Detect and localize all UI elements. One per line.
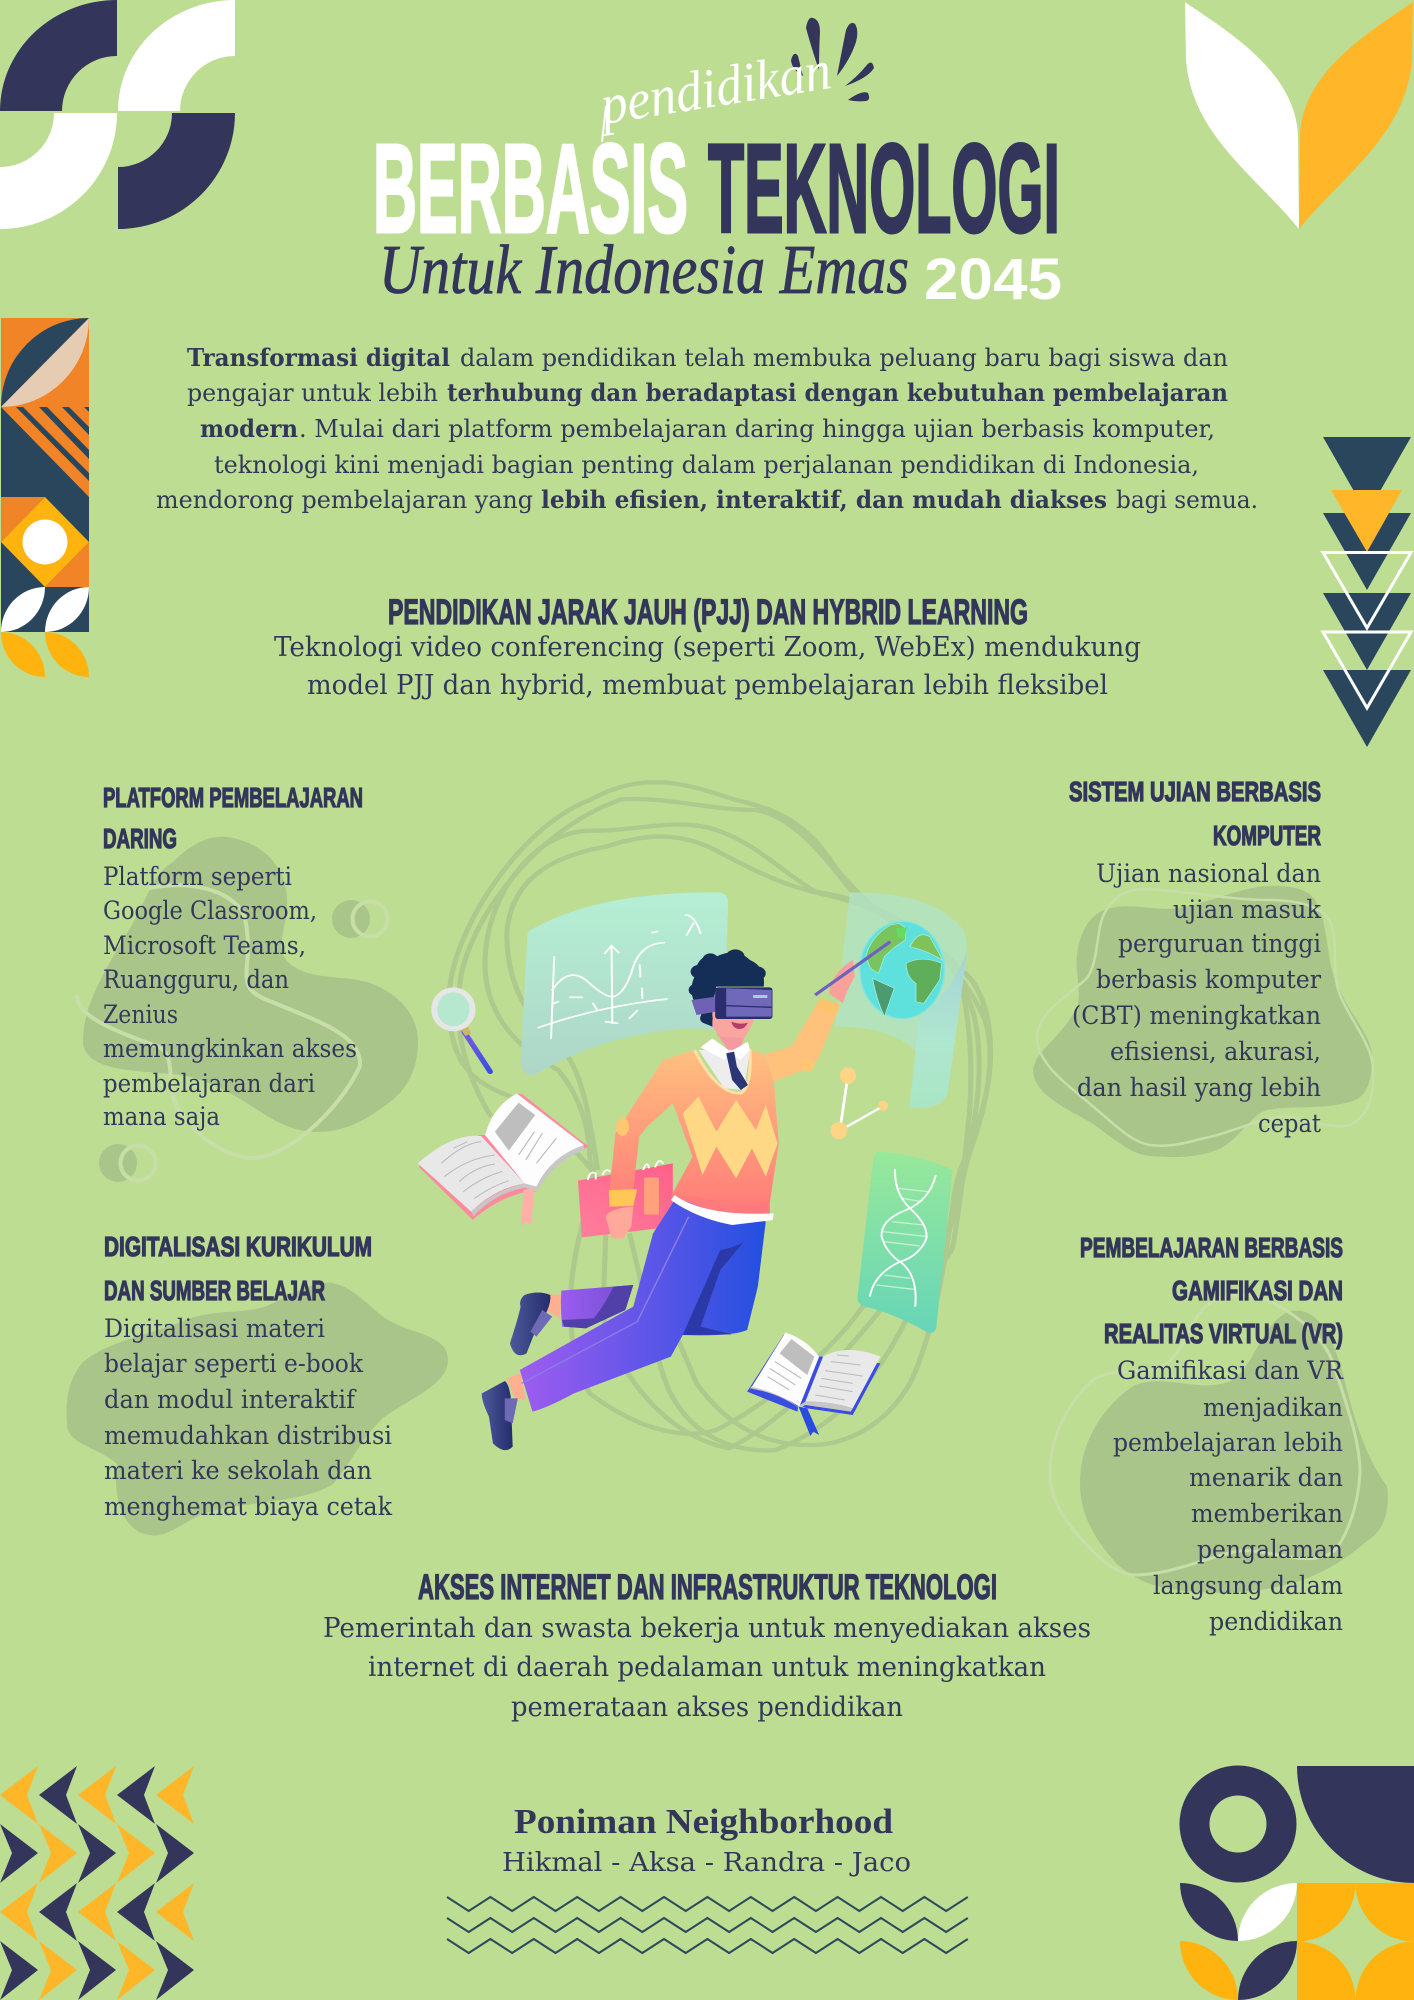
intro paragraph: modern bbox=[200, 414, 298, 443]
intro paragraph: mendorong pembelajaran yang bbox=[156, 486, 533, 514]
intro paragraph: bagi semua. bbox=[1116, 486, 1258, 514]
DNA panel bbox=[857, 1151, 953, 1333]
decoration: left geometric strip bbox=[1, 318, 89, 677]
heading: platform: PLATFORM PEMBELAJARAN bbox=[103, 782, 363, 813]
section: sistem ujian bbox=[1069, 776, 1322, 1138]
text: sistem ujian description: dan hasil yang lebih bbox=[1077, 1073, 1321, 1102]
text: platform description: mana saja bbox=[103, 1102, 220, 1131]
character: shirt and tie bbox=[699, 1033, 750, 1090]
section: pendidikan jarak jauh bbox=[274, 593, 1141, 701]
heading: digitalisasi: DAN SUMBER BELAJAR bbox=[104, 1275, 325, 1306]
heading: sistem ujian bbox=[1069, 776, 1321, 851]
text: gamifikasi description: memberikan bbox=[1191, 1499, 1343, 1528]
text: gamifikasi description: pendidikan bbox=[1209, 1607, 1343, 1636]
text: digitalisasi description: belajar seperti e-book bbox=[104, 1349, 364, 1378]
text: platform description: Microsoft Teams, bbox=[103, 931, 306, 960]
intro paragraph: . Mulai dari platform pembelajaran daring hingga ujian berbasis komputer, bbox=[299, 415, 1215, 443]
text: sistem ujian description: Ujian nasional dan bbox=[1096, 859, 1321, 888]
molecule bbox=[831, 1067, 888, 1139]
title: pendidikan: pendidikan bbox=[593, 39, 835, 137]
intro paragraph: dalam pendidikan telah membuka peluang baru bagi siswa dan bbox=[460, 344, 1228, 372]
intro paragraph: pengajar untuk lebih bbox=[187, 379, 438, 407]
heading: akses: AKSES INTERNET DAN INFRASTRUKTUR TEKNOLOGI bbox=[418, 1568, 997, 1607]
character: back leg and shoes bbox=[482, 1285, 633, 1450]
background blob: digitalisasi bbox=[67, 1283, 448, 1535]
heading: platform: DARING bbox=[103, 823, 177, 854]
team name: Poniman Neighborhood bbox=[514, 1802, 894, 1841]
text: sistem ujian description: (CBT) meningkatkan bbox=[1072, 1001, 1321, 1030]
heading: digitalisasi: DIGITALISASI KURIKULUM bbox=[104, 1231, 372, 1262]
intro paragraph: terhubung dan beradaptasi dengan kebutuhan pembelajaran bbox=[447, 378, 1228, 407]
illustration: student with VR headset bbox=[418, 782, 990, 1450]
text: gamifikasi description: menjadikan bbox=[1203, 1393, 1343, 1422]
notebook bbox=[578, 1161, 673, 1237]
intro paragraph: teknologi kini menjadi bagian penting dalam perjalanan pendidikan di Indonesia, bbox=[214, 451, 1199, 479]
heading: digitalisasi bbox=[104, 1231, 372, 1306]
globe panel bbox=[835, 892, 967, 1108]
heading: PJJ: PENDIDIKAN JARAK JAUH (PJJ) DAN HYBRID LEARNING bbox=[388, 593, 1028, 632]
intro paragraph: lebih efisien, interaktif, dan mudah diakses bbox=[541, 485, 1107, 514]
subtitle: 2045: 2045 bbox=[924, 247, 1062, 312]
text: PJJ description: Teknologi video conferencing (seperti Zoom, WebEx) mendukung bbox=[274, 632, 1141, 663]
text: sistem ujian description: perguruan tinggi bbox=[1118, 929, 1321, 958]
text: sistem ujian description: efisiensi, akurasi, bbox=[1110, 1037, 1321, 1066]
text: digitalisasi description: memudahkan distribusi bbox=[104, 1421, 392, 1450]
credits bbox=[502, 1802, 911, 1878]
text: platform description: pembelajaran dari bbox=[103, 1069, 315, 1098]
decoration: zigzag lines bbox=[447, 1897, 968, 1953]
text: akses description: pemerataan akses pendidikan bbox=[511, 1692, 903, 1723]
heading: platform bbox=[103, 782, 363, 854]
title block: BERBASIS bbox=[373, 118, 688, 259]
character: head with VR headset bbox=[689, 949, 772, 1038]
decoration: p stem bbox=[602, 106, 606, 142]
icon: spark bbox=[791, 18, 874, 101]
section: platform pembelajaran daring bbox=[103, 782, 363, 1131]
text: akses description: Pemerintah dan swasta bekerja untuk menyediakan akses bbox=[323, 1613, 1091, 1644]
section: pembelajaran gamifikasi bbox=[1080, 1232, 1344, 1636]
text: gamifikasi description: langsung dalam bbox=[1153, 1571, 1343, 1600]
globe bbox=[860, 921, 944, 1019]
text: digitalisasi description: dan modul interaktif bbox=[104, 1385, 357, 1414]
text: digitalisasi description: Digitalisasi materi bbox=[104, 1314, 325, 1343]
text: platform description bbox=[103, 862, 357, 1131]
text: gamifikasi description: menarik dan bbox=[1189, 1463, 1343, 1492]
text: PJJ description: model PJJ dan hybrid, membuat pembelajaran lebih fleksibel bbox=[307, 670, 1108, 701]
text: sistem ujian description: cepat bbox=[1258, 1109, 1321, 1138]
open book blue bbox=[747, 1332, 880, 1436]
text: platform description: memungkinkan akses bbox=[103, 1034, 357, 1063]
text: gamifikasi description bbox=[1113, 1356, 1344, 1636]
character: trousers bbox=[520, 1197, 766, 1412]
heading: sistem ujian: SISTEM UJIAN BERBASIS bbox=[1069, 776, 1321, 807]
background blob: platform bbox=[77, 837, 418, 1182]
background blob: gamifikasi bbox=[1050, 1295, 1388, 1593]
heading: gamifikasi: GAMIFIKASI DAN bbox=[1172, 1275, 1343, 1306]
decoration: top-right leaves bbox=[1185, 2, 1413, 229]
magnifying glass bbox=[431, 987, 490, 1072]
scribble loops bbox=[449, 782, 990, 1450]
heading: gamifikasi bbox=[1080, 1232, 1343, 1349]
text: sistem ujian description bbox=[1072, 859, 1322, 1138]
math panel bbox=[521, 892, 728, 1075]
text: platform description: Ruangguru, dan bbox=[103, 965, 289, 994]
subtitle: untuk indonesia emas: Untuk Indonesia Emas bbox=[379, 232, 909, 309]
text: sistem ujian description: berbasis komputer bbox=[1096, 965, 1321, 994]
decoration: top-left arcs bbox=[0, 0, 235, 229]
text: PJJ description bbox=[274, 632, 1141, 701]
section: digitalisasi kurikulum bbox=[104, 1231, 393, 1521]
text: gamifikasi description: pengalaman bbox=[1197, 1535, 1343, 1564]
character: sweater bbox=[606, 998, 841, 1238]
text: sistem ujian description: ujian masuk bbox=[1173, 895, 1322, 924]
intro paragraph: Transformasi digital bbox=[187, 343, 450, 372]
title block bbox=[373, 18, 1062, 312]
text: platform description: Google Classroom, bbox=[103, 896, 317, 925]
intro paragraph bbox=[156, 343, 1258, 514]
text: digitalisasi description bbox=[104, 1314, 393, 1521]
open book pink bbox=[418, 1093, 589, 1227]
decoration: bottom-left chevrons bbox=[0, 1766, 194, 2000]
character: hand and pointer bbox=[815, 942, 890, 1003]
decoration: bottom-right geometric block bbox=[1180, 1766, 1414, 2000]
text: platform description: Platform seperti bbox=[103, 862, 292, 891]
text: platform description: Zenius bbox=[103, 1000, 178, 1029]
text: digitalisasi description: materi ke sekolah dan bbox=[104, 1456, 372, 1485]
section: akses internet bbox=[323, 1568, 1091, 1723]
text: akses description: internet di daerah pedalaman untuk meningkatkan bbox=[368, 1652, 1046, 1683]
background blob: sistem ujian bbox=[1033, 886, 1373, 1157]
decoration: right triangles bbox=[1323, 437, 1411, 747]
team members: Hikmal - Aksa - Randra - Jaco bbox=[502, 1848, 911, 1878]
heading: sistem ujian: KOMPUTER bbox=[1213, 820, 1321, 851]
text: digitalisasi description: menghemat biaya cetak bbox=[104, 1492, 393, 1521]
text: akses description bbox=[323, 1613, 1091, 1723]
text: gamifikasi description: pembelajaran lebih bbox=[1113, 1428, 1343, 1457]
text: gamifikasi description: Gamifikasi dan VR bbox=[1117, 1356, 1344, 1385]
